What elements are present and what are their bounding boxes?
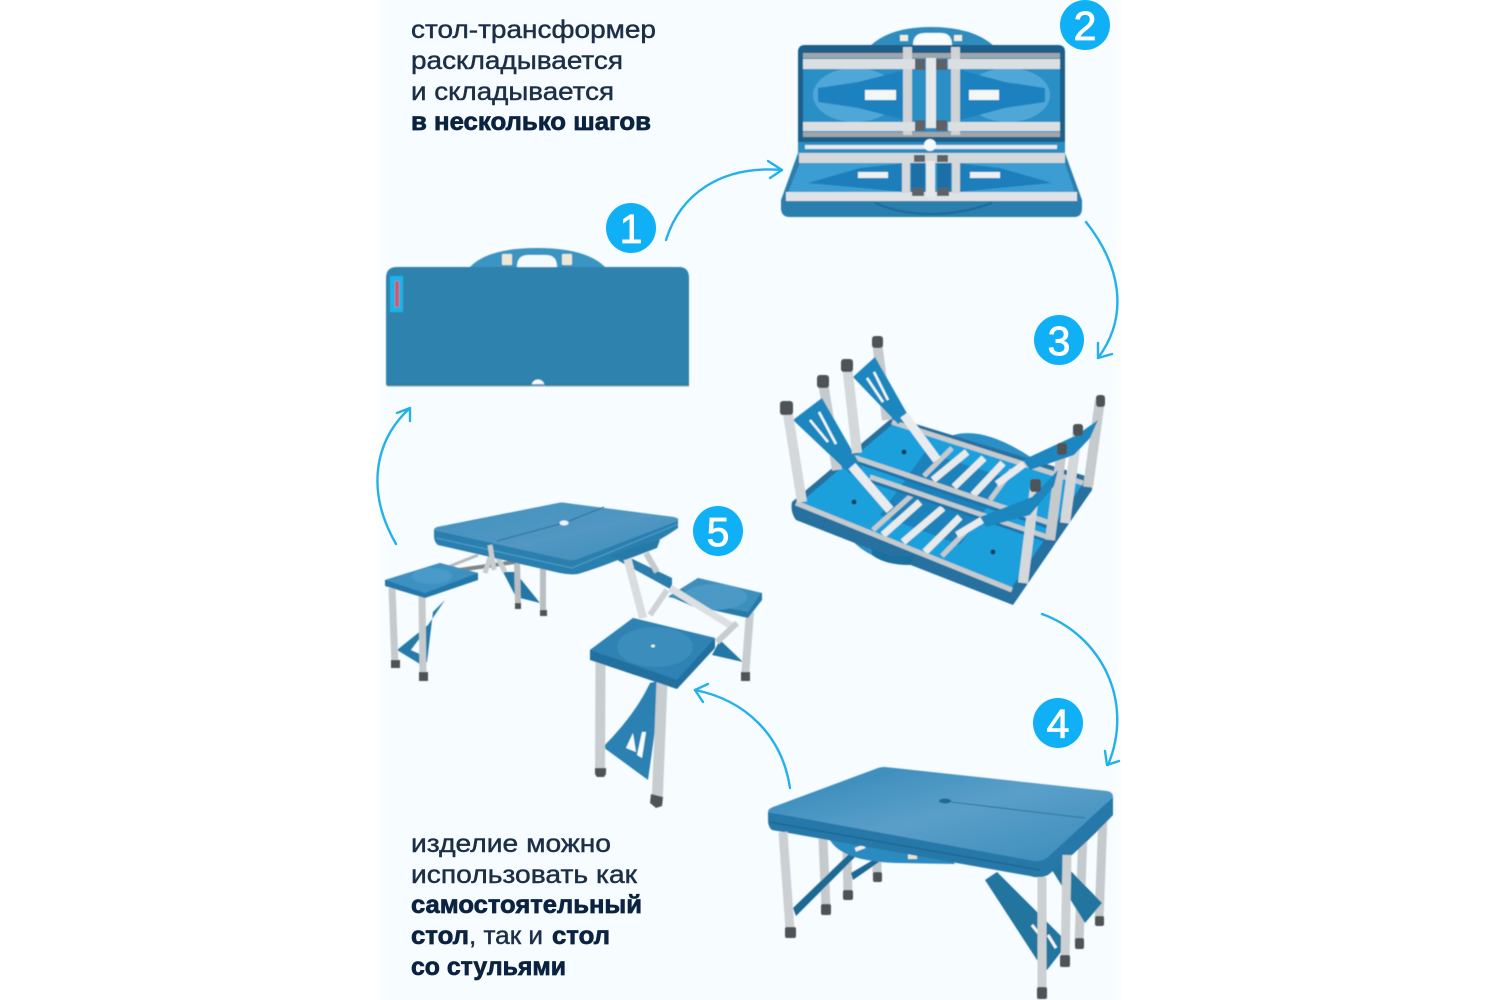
badge: step 5: 5 [707,509,729,555]
badge: step 1: 1 [620,206,642,252]
text block: usage note: , так и [469,922,543,950]
folded handle [828,834,955,864]
rubber feet [785,872,1104,999]
stool: back right [712,640,743,662]
right arm [610,553,672,590]
table side [434,518,678,574]
badge: step 2: 2 [1074,3,1096,49]
hinge [490,545,494,570]
stool: front [603,680,662,780]
illustration: opened case, step 2 [781,27,1082,217]
arrow: step 5 to 1 [377,408,410,544]
table top surface [434,502,678,560]
illustration: table upside down, step 3 [780,336,1105,605]
panel: background [378,0,1122,1000]
badge: step 5 [693,506,743,556]
text block: usage note: изделие можно [411,830,611,858]
badge: step 2 [1060,0,1110,50]
front braces [985,872,1068,970]
text block: intro [411,16,656,136]
table top surface [768,767,1113,861]
text block: intro: в несколько шагов [411,108,651,136]
back legs [823,342,1100,540]
text block: intro: и складывается [411,78,614,106]
umbrella hole and seam [939,798,951,804]
table side [768,797,1113,877]
arrow: step 1 to 2 [666,161,782,240]
left arm [445,562,515,572]
arrow: step 4 to 5 [695,684,790,788]
right braces [980,470,1058,527]
arrow: step 2 to 3 [1086,222,1117,358]
arrow: step 3 to 4 [1042,614,1119,765]
stool: left [397,600,445,664]
text block: usage note: стол [552,922,610,950]
back legs and braces [823,815,1103,943]
table hole and seam [560,520,568,526]
text block: usage note [411,830,642,981]
illustration: standing table, step 4 [768,767,1113,999]
illustration: folded table, step 1 [386,248,689,392]
badge: step 3 [1034,315,1084,365]
badge: step 4 [1033,698,1083,748]
text block: intro: раскладывается [411,47,623,75]
illustration: table with seats, step 5 [385,502,762,808]
front legs [787,365,1078,583]
badge: step 3: 3 [1048,318,1070,364]
text block: intro: стол-трансформер [411,16,656,44]
text block: usage note: самостоятельный [411,891,642,919]
text block: usage note: использовать как [411,861,638,889]
text block: usage note: со стульями [411,953,566,981]
badge: step 1 [606,203,656,253]
front legs [783,832,1067,992]
rubber feet [780,336,1105,492]
text block: usage note: стол [411,922,469,950]
back legs under table [503,572,540,603]
left struts [852,415,937,510]
left braces [793,398,862,474]
badge: step 4: 4 [1047,701,1069,747]
